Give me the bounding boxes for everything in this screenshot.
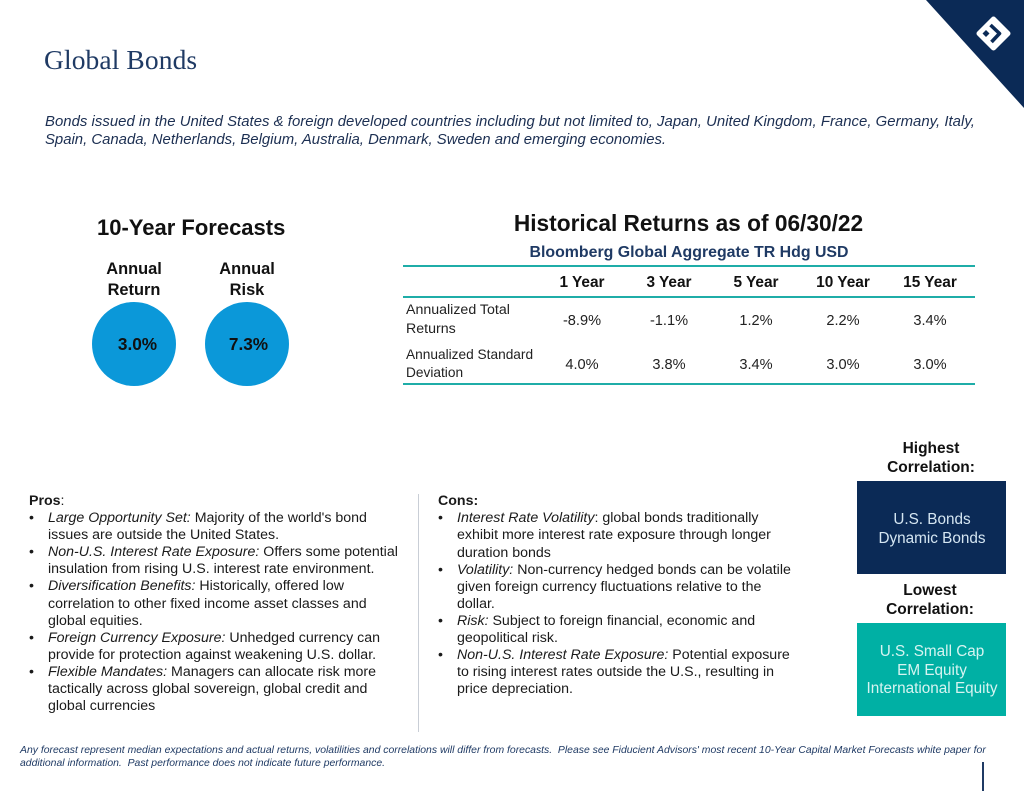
row: annualized total returns: Annualized Total xyxy=(406,302,510,318)
lowest correlation heading: Lowest xyxy=(903,582,957,599)
panel: pros: global equities. xyxy=(48,613,143,629)
panel: pros: Foreign Currency Exposure: Unhedged currency can xyxy=(48,630,380,646)
panel: cons: • xyxy=(438,613,443,629)
annual risk label: Risk xyxy=(230,281,264,299)
panel: pros xyxy=(29,493,398,714)
footnote: Any forecast represent median expectations and actual returns, volatilities and correlations will differ from forecasts. Please see Fiducient Advisors' most recent 10-Year Capital Market Forecasts white paper for xyxy=(20,745,986,756)
panel: historical returns xyxy=(403,210,975,385)
row: annualized total returns: -8.9% xyxy=(563,313,601,329)
panel: pros: insulation from rising U.S. interest rate environment. xyxy=(48,561,374,577)
panel: pros: Large Opportunity Set: Majority of the world's bond xyxy=(48,510,367,526)
panel: cons: given foreign currency fluctuations relative to the xyxy=(457,579,761,595)
intro text xyxy=(45,114,975,148)
annual risk value: 7.3% xyxy=(229,334,268,354)
panel: cons: • xyxy=(438,510,443,526)
row: annualized total returns: 3.4% xyxy=(913,313,947,329)
panel: pros: provide for protection against weakening U.S. dollar. xyxy=(48,647,376,663)
panel: pros: issues are outside the United States. xyxy=(48,527,279,543)
panel: cons: to rising interest rates outside the U.S., resulting in xyxy=(457,664,774,680)
panel: pros: Flexible Mandates: Managers can allocate risk more xyxy=(48,664,376,680)
panel: pros: global currencies xyxy=(48,698,155,714)
panel: pros: Diversification Benefits: Historically, offered low xyxy=(48,578,344,594)
panel: pros: • xyxy=(29,544,34,560)
lowest correlation box: U.S. Small Cap xyxy=(880,643,984,660)
panel: cons: Cons: xyxy=(438,493,478,509)
heading: 10-year forecasts: 10-Year Forecasts xyxy=(97,215,285,240)
highest correlation box: Dynamic Bonds xyxy=(878,530,986,547)
lowest correlation heading xyxy=(886,582,974,618)
row: annualized total returns: Returns xyxy=(406,321,456,337)
highest correlation box xyxy=(857,481,1006,574)
row: annualized total returns xyxy=(406,302,947,337)
heading: historical returns: Historical Returns as of 06/30/22 xyxy=(514,210,863,236)
panel: cons: duration bonds xyxy=(457,545,551,561)
panel: 10-year forecasts xyxy=(92,215,289,386)
lowest correlation box: EM Equity xyxy=(897,662,967,678)
annual risk circle xyxy=(205,302,289,386)
panel: pros: Pros: xyxy=(29,493,64,509)
subheading: benchmark: Bloomberg Global Aggregate TR Hdg USD xyxy=(530,244,848,261)
row: annualized standard deviation: 3.0% xyxy=(826,357,860,373)
panel: pros: • xyxy=(29,630,34,646)
row: annualized standard deviation: Deviation xyxy=(406,364,463,380)
panel: pros: • xyxy=(29,664,34,680)
highest correlation heading xyxy=(887,440,975,476)
panel: cons: exhibit more interest rate exposure through longer xyxy=(457,527,771,543)
row: annualized total returns: 1.2% xyxy=(739,313,773,329)
intro text: Bonds issued in the United States & foreign developed countries including but not limited to, Japan, United Kingdom, France, Germany, Italy, xyxy=(45,114,975,130)
row: annualized standard deviation: Annualized Standard xyxy=(406,347,533,362)
highest correlation heading: Correlation: xyxy=(887,459,975,476)
panel: pros: correlation to other fixed income asset classes and xyxy=(48,596,367,612)
panel: cons: Risk: Subject to foreign financial, economic and xyxy=(457,613,755,629)
panel: cons: • xyxy=(438,647,443,663)
footnote xyxy=(20,745,986,769)
row: annualized standard deviation xyxy=(406,347,947,380)
title: Global Bonds xyxy=(44,44,197,75)
panel: cons: Non-U.S. Interest Rate Exposure: Potential exposure xyxy=(457,647,790,663)
row: annualized standard deviation: 4.0% xyxy=(565,357,599,373)
panel: cons: price depreciation. xyxy=(457,681,573,697)
row: annualized standard deviation: 3.8% xyxy=(652,357,686,373)
intro text: Spain, Canada, Netherlands, Belgium, Australia, Denmark, Sweden and emerging economies. xyxy=(45,132,666,148)
panel: pros: Non-U.S. Interest Rate Exposure: Offers some potential xyxy=(48,544,398,560)
returns table xyxy=(403,265,975,385)
annual return label: Return xyxy=(108,281,160,299)
column headers: 10 Year xyxy=(816,274,870,291)
panel: cons: geopolitical risk. xyxy=(457,630,558,646)
footnote: additional information. Past performance does not indicate future performance. xyxy=(20,758,385,769)
column headers xyxy=(559,274,957,291)
row: annualized total returns: -1.1% xyxy=(650,313,688,329)
annual return label: Annual xyxy=(106,260,162,278)
column headers: 15 Year xyxy=(903,274,957,291)
annual return label xyxy=(106,260,162,299)
annual return circle xyxy=(92,302,176,386)
row: annualized standard deviation: 3.4% xyxy=(739,357,773,373)
panel: cons: Volatility: Non-currency hedged bonds can be volatile xyxy=(457,562,791,578)
highest correlation box: U.S. Bonds xyxy=(893,511,971,528)
panel: cons: Interest Rate Volatility: global bonds traditionally xyxy=(457,510,759,526)
lowest correlation box: International Equity xyxy=(867,680,997,697)
lowest correlation heading: Correlation: xyxy=(886,601,974,618)
annual return value: 3.0% xyxy=(118,334,157,354)
panel: cons: dollar. xyxy=(457,596,495,612)
column headers: 1 Year xyxy=(559,274,605,291)
highest correlation heading: Highest xyxy=(903,440,959,457)
panel: cons xyxy=(438,493,791,697)
panel: pros: • xyxy=(29,510,34,526)
lowest correlation box xyxy=(857,623,1006,716)
panel: pros: • xyxy=(29,578,34,594)
panel: cons: • xyxy=(438,562,443,578)
row: annualized total returns: 2.2% xyxy=(826,313,860,329)
column headers: 5 Year xyxy=(733,274,779,291)
annual risk label: Annual xyxy=(219,260,275,278)
annual risk label xyxy=(219,260,275,299)
row: annualized standard deviation: 3.0% xyxy=(913,357,947,373)
panel: pros: tactically across global sovereign, global credit and xyxy=(48,681,367,697)
column headers: 3 Year xyxy=(646,274,692,291)
corner logo banner xyxy=(926,0,1024,108)
